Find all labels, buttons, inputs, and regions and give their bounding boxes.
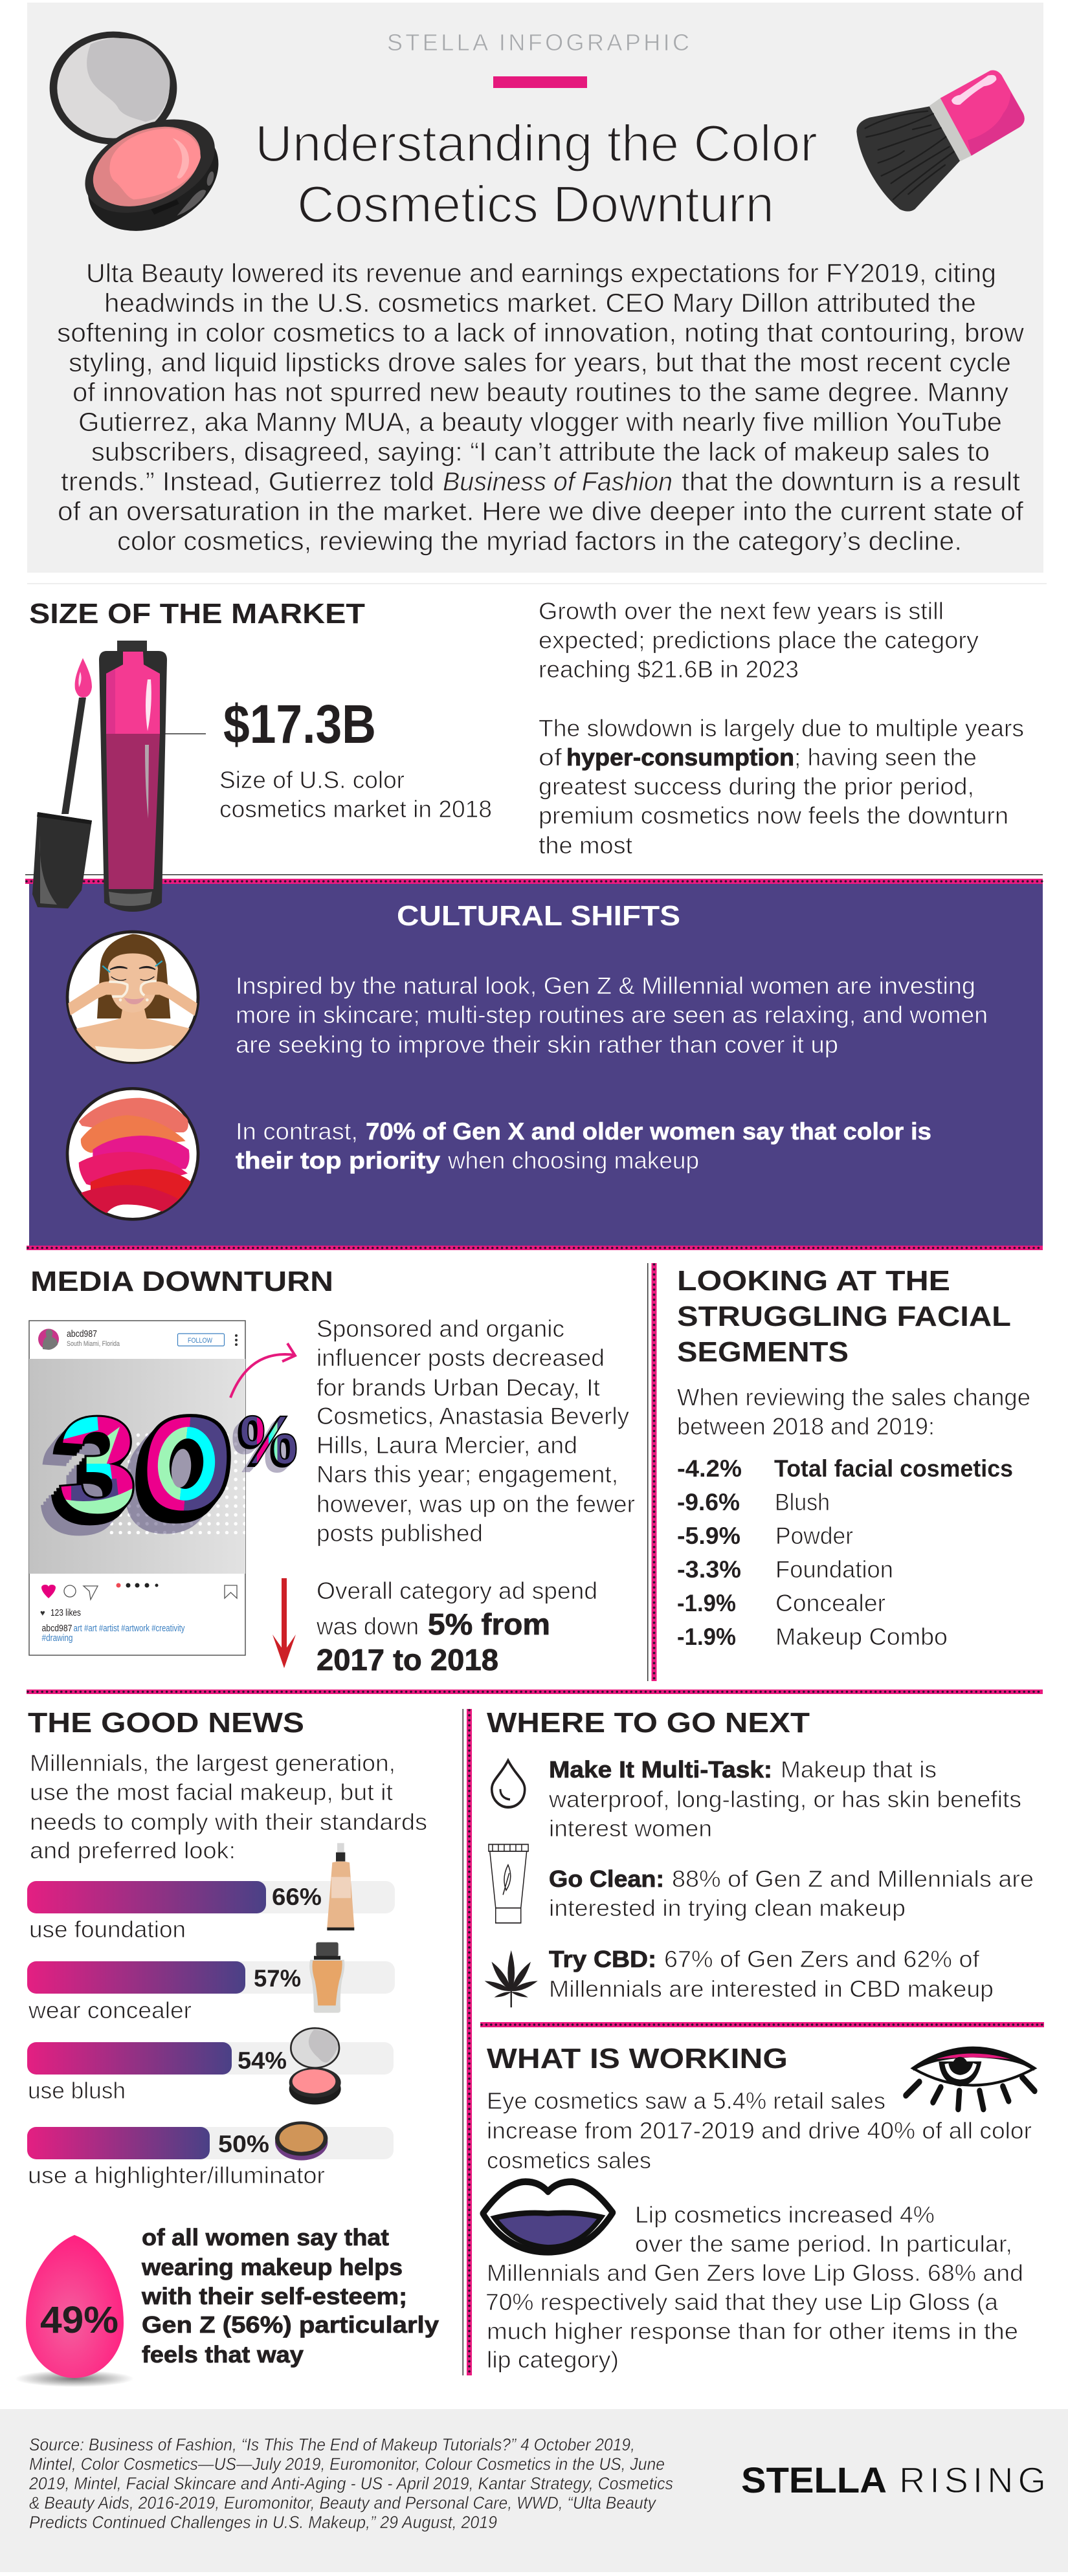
text: self-esteem: with their self-esteem;: [141, 2283, 407, 2309]
text: try CBD: 67% of Gen Zers and 62% of: [664, 1946, 980, 1972]
text: lip cosmetics: Lip cosmetics increased 4%: [635, 2201, 935, 2228]
table: facial segment changes: -4.2%: [677, 1455, 742, 1482]
text: slowdown explanation: [539, 715, 1024, 859]
avatar: [38, 1329, 59, 1350]
text: influencer posts: Nars this year; engagement,: [317, 1461, 618, 1488]
text: slowdown explanation: ; having seen the: [794, 744, 977, 771]
stat: 17.3B market size: [146, 694, 492, 822]
text: influencer posts: Hills, Laura Mercier, and: [317, 1432, 577, 1459]
text: self-esteem: feels that way: [142, 2341, 304, 2368]
heading: what is working: WHAT IS WORKING: [487, 2043, 788, 2075]
text: influencer posts: posts published: [317, 1520, 483, 1547]
bar: concealer 57%: 57%: [254, 1965, 301, 1992]
panel: struggling facial segments: [677, 1265, 1030, 1650]
text: lip cosmetics: over the same period. In particular,: [635, 2230, 1012, 2257]
caption: art #art #artist #artwork #creativity: [74, 1623, 185, 1634]
text: self-esteem: Gen Z (56%) particularly: [142, 2311, 439, 2338]
intro paragraph: softening in color cosmetics to a lack of innovation, noting that contouring, brow: [57, 318, 1024, 347]
text: natural look: [236, 973, 988, 1058]
text: Gen X priority: when choosing makeup: [447, 1147, 699, 1174]
text: influencer posts: influencer posts decreased: [317, 1345, 605, 1371]
text: sales change intro: [677, 1384, 1030, 1440]
table: facial segment changes: Blush: [775, 1489, 830, 1515]
table: facial segment changes: Powder: [775, 1523, 853, 1549]
stat: 17.3B market size: Size of U.S. color: [219, 767, 405, 793]
text: growth forecast: Growth over the next few years is still: [539, 598, 944, 624]
follow button: FOLLOW: [188, 1337, 213, 1345]
icon: foundation tube: [327, 1843, 354, 1930]
text: ad spend: 2017 to 2018: [317, 1643, 498, 1677]
table: facial segment changes: Foundation: [775, 1556, 893, 1583]
heading: struggling facial segments: [677, 1265, 1011, 1368]
panel: where to go next: [484, 1707, 1034, 2007]
bar: foundation 66%: use foundation: [29, 1916, 186, 1943]
text: millennials intro: needs to comply with their standards: [30, 1809, 427, 1835]
text: eye cosmetics: increase from 2017-2019 and drive 40% of all color: [487, 2117, 1032, 2144]
text: go clean: Go Clean:: [549, 1866, 664, 1892]
table: facial segment changes: -1.9%: [677, 1590, 736, 1616]
number: 30: [41, 1414, 231, 1536]
text: millennials intro: [30, 1750, 427, 1864]
text: Gen X priority: In contrast,: [236, 1118, 358, 1145]
heading: where to go next: WHERE TO GO NEXT: [487, 1707, 810, 1739]
caption: ♥: [40, 1608, 45, 1618]
icon: blush compact small: [289, 2028, 341, 2104]
text: slowdown explanation: of: [539, 744, 562, 771]
intro paragraph: of innovation has not spurred new beauty routines to the same degree. Manny: [72, 377, 1009, 407]
text: influencer posts: Sponsored and organic: [317, 1316, 564, 1342]
text: millennials intro: Millennials, the largest generation,: [30, 1750, 395, 1776]
icon: concealer bottle: [309, 1943, 344, 2013]
eyebrow: Stella Infographic: STELLA INFOGRAPHIC: [387, 29, 689, 56]
social post mockup: [29, 1321, 298, 1655]
intro paragraph: subscribers, disagreed, saying: “I can’t attribute the lack of makeup sales to: [91, 437, 990, 467]
text: natural look: Inspired by the natural look, Gen Z & Millennial women are investing: [236, 973, 975, 999]
bar: concealer 57%: [27, 1961, 395, 2023]
text: go clean: 88% of Gen Z and Millennials are: [672, 1866, 1034, 1892]
bar: blush 54%: use blush: [28, 2077, 126, 2104]
number: percent sign: %: [239, 1402, 298, 1479]
icons: makeup products: [275, 1843, 354, 2161]
source citation: & Beauty Aids, 2016-2019, Euromonitor, Beauty and Personal Care, WWD, “Ulta Beauty: [29, 2493, 656, 2513]
intro paragraph: Ulta Beauty lowered its revenue and earnings expectations for FY2019, citing: [86, 258, 996, 288]
number: 30: 0: [133, 1388, 241, 1540]
title: Cosmetics Downturn: [297, 175, 774, 233]
text: ad spend: 5% from: [428, 1607, 550, 1641]
text: lip cosmetics: 70% respectively said that they use Lip Gloss (a: [485, 2289, 999, 2315]
icon: blush compact: [50, 32, 236, 252]
caption: abcd987: [41, 1623, 72, 1634]
intro paragraph: of an oversaturation in the market. Here we dive deeper into the current state of: [58, 496, 1024, 526]
icon: beauty sponge: [15, 2235, 134, 2387]
text: lip cosmetics: [485, 2201, 1023, 2373]
text: slowdown explanation: premium cosmetics now feels the downturn: [539, 802, 1008, 829]
icon: tube with leaf: [489, 1844, 528, 1923]
text: try CBD: Millennials are interested in CBD makeup: [549, 1976, 994, 2002]
text: multi-task: Make It Multi-Task:: [549, 1756, 772, 1783]
text: Gen X priority: [236, 1118, 931, 1174]
text: try CBD: Try CBD:: [549, 1946, 656, 1972]
bar: highlighter 50%: use a highlighter/illuminator: [28, 2162, 325, 2188]
heading: struggling facial segments: STRUGGLING FACIAL: [677, 1301, 1011, 1332]
text: natural look: are seeking to improve their skin rather than cover it up: [236, 1031, 838, 1058]
header panel: [27, 3, 1043, 573]
text: self-esteem: [141, 2224, 439, 2368]
stat: 49% self-esteem: 49%: [40, 2299, 118, 2341]
bar chart: makeup usage: [27, 1881, 395, 2188]
table: facial segment changes: -3.3%: [677, 1556, 741, 1583]
number: 30: 3: [58, 1389, 138, 1541]
text: slowdown explanation: The slowdown is largely due to multiple years: [539, 715, 1024, 742]
icon: woman washing face: [67, 932, 199, 1066]
arrow: curved pink: [230, 1343, 295, 1398]
table: facial segment changes: Concealer: [775, 1590, 885, 1616]
bar: blush 54%: 54%: [238, 2047, 287, 2074]
text: influencer posts: [317, 1316, 635, 1547]
source citation: 2019, Mintel, Facial Skincare and Anti-Aging - US - April 2019, Kantar Strategy, Cosmetics: [28, 2474, 673, 2493]
heading: size of the market: SIZE OF THE MARKET: [29, 598, 365, 630]
text: millennials intro: use the most facial makeup, but it: [30, 1779, 393, 1805]
text: slowdown explanation: hyper-consumption: [566, 744, 794, 771]
title: Understanding the Color: [255, 115, 818, 172]
intro paragraph: color cosmetics, reviewing the myriad factors in the category’s decline.: [117, 526, 962, 556]
table: facial segment changes: -1.9%: [677, 1624, 736, 1650]
text: influencer posts: however, was up on the fewer: [317, 1491, 635, 1517]
bar: highlighter 50%: 50%: [218, 2131, 269, 2157]
illustration: lip gloss tube and applicator: [32, 641, 167, 912]
icon: highlighter: [275, 2121, 328, 2161]
text: growth forecast: reaching $21.6B in 2023: [539, 656, 799, 683]
intro paragraph: headwinds in the U.S. cosmetics market. CEO Mary Dillon attributed the: [104, 288, 976, 318]
source citation: Source: Business of Fashion, “Is This The End of Makeup Tutorials?” 4 October 2019,: [29, 2435, 635, 2454]
username: South Miami, Florida: [67, 1340, 120, 1348]
text: try CBD: [549, 1946, 994, 2002]
text: eye cosmetics: cosmetics sales: [487, 2147, 651, 2174]
heading: struggling facial segments: LOOKING AT THE: [677, 1265, 950, 1297]
source citation: Predicts Continued Challenges in U.S. Makeup,” 29 August, 2019: [29, 2513, 497, 2532]
bar: highlighter 50%: [27, 2127, 394, 2188]
intro paragraph: styling, and liquid lipsticks drove sales for years, but that the most recent cycle: [69, 347, 1011, 377]
text: eye cosmetics: [487, 2087, 1032, 2174]
table: facial segment changes: -9.6%: [677, 1489, 740, 1515]
heading: cultural shifts: CULTURAL SHIFTS: [397, 900, 680, 932]
caption: #drawing: [41, 1633, 72, 1644]
icon: eye: [906, 2048, 1034, 2109]
icon: water drop: [492, 1761, 525, 1807]
text: self-esteem: of all women say that: [142, 2224, 389, 2251]
follow button: [177, 1334, 224, 1346]
text: multi-task: Makeup that is: [781, 1756, 937, 1783]
source citation: Mintel, Color Cosmetics—US—July 2019, Euromonitor, Colour Cosmetics in the US, June: [29, 2454, 665, 2474]
post actions: [41, 1583, 237, 1600]
footer panel: [0, 2409, 1068, 2572]
text: multi-task: waterproof, long-lasting, or has skin benefits: [548, 1786, 1021, 1812]
text: go clean: [549, 1866, 1034, 1921]
panel: size of the market: [29, 598, 1024, 859]
table: facial segment changes: Total facial cosmetics: [774, 1455, 1013, 1482]
heading: media downturn: MEDIA DOWNTURN: [30, 1266, 333, 1297]
icon: cannabis leaf: [484, 1950, 539, 2007]
text: lip cosmetics: lip category): [487, 2346, 619, 2373]
intro paragraph: Business of Fashion: [443, 467, 673, 496]
text: growth forecast: [539, 598, 979, 683]
text: ad spend: Overall category ad spend: [317, 1578, 597, 1604]
text: influencer posts: Cosmetics, Anastasia Beverly: [317, 1403, 629, 1429]
text: eye cosmetics: Eye cosmetics saw a 5.4% retail sales: [487, 2087, 885, 2114]
text: Gen X priority: 70% of Gen X and older women say that color is: [366, 1118, 931, 1145]
icon: lips: [483, 2182, 613, 2252]
panel: cultural shifts: [25, 879, 1043, 1250]
text: natural look: more in skincare; multi-step routines are seen as relaxing, and women: [236, 1002, 988, 1028]
text: lip cosmetics: Millennials and Gen Zers love Lip Gloss. 68% and: [487, 2260, 1023, 2286]
table: facial segment changes: [677, 1455, 1013, 1650]
tube: [99, 641, 167, 912]
text: millennials intro: and preferred look:: [30, 1837, 236, 1864]
table: facial segment changes: -5.9%: [677, 1523, 740, 1549]
caption: 123 likes: [50, 1607, 81, 1618]
panel: what is working: [483, 2043, 1034, 2373]
text: Gen X priority: their top priority: [236, 1147, 440, 1174]
text: sales change intro: When reviewing the sales change: [677, 1384, 1030, 1411]
bar: foundation 66%: 66%: [272, 1884, 322, 1910]
text: self-esteem: wearing makeup helps: [141, 2254, 403, 2280]
panel: the good news: [15, 1707, 439, 2387]
text: lip cosmetics: much higher response than for other items in the: [487, 2318, 1018, 2344]
panel: media downturn: [29, 1266, 635, 1677]
bar: concealer 57%: wear concealer: [28, 1997, 192, 2023]
text: influencer posts: for brands Urban Decay, It: [317, 1374, 601, 1401]
text: multi-task: interest women: [549, 1815, 712, 1842]
logo: Stella Rising: [741, 2460, 1046, 2500]
title: [255, 115, 818, 233]
post image: 30 percent: [29, 1359, 298, 1574]
text: sales change intro: between 2018 and 2019:: [677, 1413, 935, 1440]
arrow: red down: [273, 1578, 296, 1668]
intro paragraph: Gutierrez, aka Manny MUA, a beauty vlogger with nearly five million YouTube: [78, 407, 1002, 437]
username: [67, 1328, 120, 1348]
text: slowdown explanation: the most: [539, 832, 633, 859]
text: go clean: interested in trying clean makeup: [549, 1895, 906, 1921]
bar: foundation 66%: [27, 1881, 395, 1943]
caption: [40, 1607, 185, 1644]
stat: 17.3B market size: $17.3B: [223, 694, 376, 754]
text: slowdown explanation: greatest success during the prior period,: [539, 773, 974, 800]
username: abcd987: [67, 1328, 97, 1339]
text: growth forecast: expected; predictions place the category: [539, 627, 979, 654]
text: multi-task: [548, 1756, 1021, 1842]
logo: Stella Rising: STELLA: [741, 2460, 887, 2500]
logo: Stella Rising: RISING: [899, 2460, 1046, 2500]
stat: 49% self-esteem: [15, 2224, 439, 2387]
bar: blush 54%: [27, 2042, 394, 2104]
icon: lipstick swatches: [67, 1088, 198, 1219]
pink accent bar: [493, 76, 587, 88]
text: ad spend: [316, 1578, 597, 1677]
text: ad spend: was down: [316, 1613, 419, 1640]
heading: the good news: THE GOOD NEWS: [28, 1707, 304, 1739]
applicator: [32, 658, 92, 908]
heading: struggling facial segments: SEGMENTS: [677, 1336, 849, 1368]
source citation: [28, 2435, 673, 2532]
intro paragraph: trends.” Instead, Gutierrez told: [61, 467, 434, 496]
icon: makeup brush: [856, 71, 1025, 212]
stat: 17.3B market size: cosmetics market in 2018: [219, 796, 492, 822]
table: facial segment changes: Makeup Combo: [775, 1624, 948, 1650]
intro paragraph: that the downturn is a result: [682, 467, 1021, 496]
intro paragraph: [57, 258, 1024, 556]
